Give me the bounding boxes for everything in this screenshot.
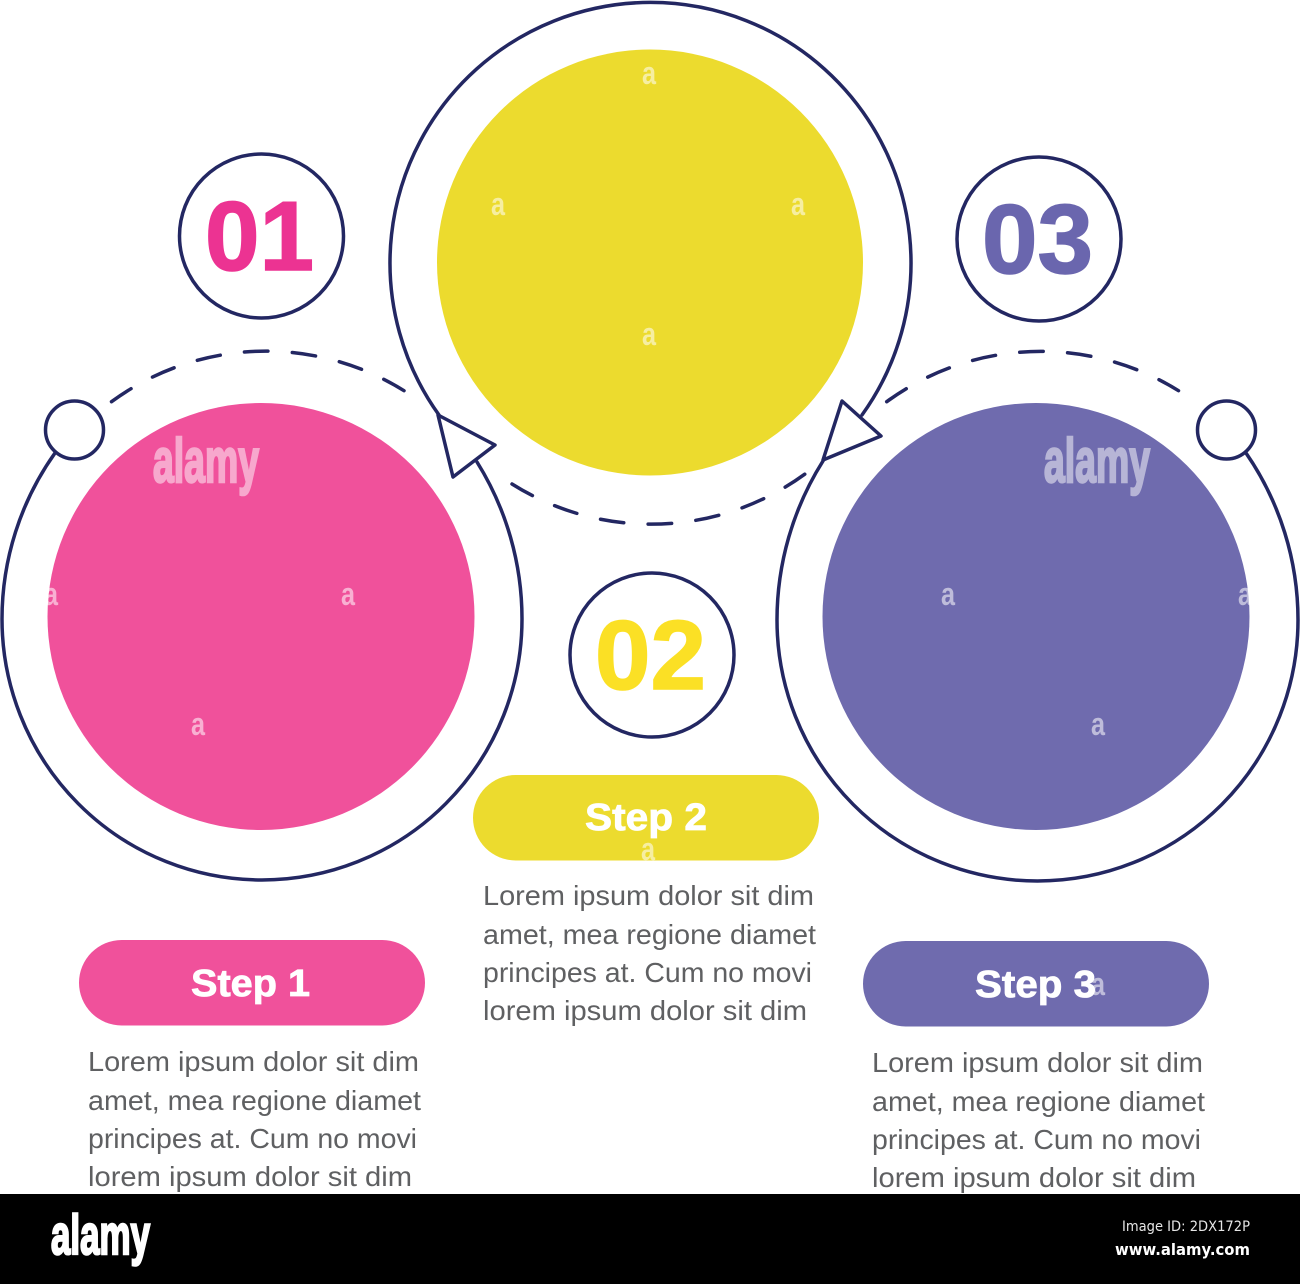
text block: step 3: principes at. Cum no movi xyxy=(872,1124,1201,1155)
text block: step 1: principes at. Cum no movi xyxy=(88,1123,417,1154)
text block: step 2: principes at. Cum no movi xyxy=(483,957,812,988)
text block: step 3: lorem ipsum dolor sit dim xyxy=(872,1162,1196,1193)
small watermark marks: a xyxy=(791,186,805,222)
pill: step 1 xyxy=(79,940,425,1026)
small watermark marks: a xyxy=(941,576,955,612)
node circle: right xyxy=(1198,401,1256,459)
outer ring: step 1 xyxy=(2,453,522,880)
text block: step 3: Lorem ipsum dolor sit dim xyxy=(872,1047,1203,1078)
dashed arc: step 3 onward xyxy=(887,351,1178,402)
arrowhead: right xyxy=(823,401,881,460)
text block: step 3 xyxy=(872,1047,1205,1193)
small watermark marks xyxy=(44,55,1252,1002)
text block: step 3: amet, mea regione diamet xyxy=(872,1086,1205,1117)
small watermark marks: a xyxy=(44,576,58,612)
number badge 01 xyxy=(180,154,344,318)
small watermark marks: a xyxy=(642,316,656,352)
footer logo: alamy xyxy=(51,1203,150,1266)
small watermark marks: a xyxy=(191,706,205,742)
pill: step 1: Step 1 xyxy=(191,963,310,1005)
filled disc: step 3 xyxy=(822,403,1250,830)
small watermark marks: a xyxy=(641,831,655,867)
pill: step 2 xyxy=(473,775,819,860)
text block: step 1: amet, mea regione diamet xyxy=(88,1085,421,1116)
text block: step 1: Lorem ipsum dolor sit dim xyxy=(88,1046,419,1077)
pill: step 3 xyxy=(863,941,1209,1026)
panel: step 2 circle xyxy=(390,2,911,476)
text block: step 2: lorem ipsum dolor sit dim xyxy=(483,995,807,1026)
image id: Image ID: 2DX172P xyxy=(1122,1219,1250,1235)
number badge 03 xyxy=(957,157,1121,321)
outer ring: step 2 xyxy=(390,2,911,415)
small watermark marks: a xyxy=(1238,576,1252,612)
small watermark marks: a xyxy=(1091,706,1105,742)
small watermark marks: a xyxy=(341,576,355,612)
text block: step 2: amet, mea regione diamet xyxy=(483,919,816,950)
text block: step 1: lorem ipsum dolor sit dim xyxy=(88,1161,412,1192)
panel: step 3 circle xyxy=(777,403,1298,881)
pill: step 2: Step 2 xyxy=(585,797,707,839)
number badge 01: 01 xyxy=(205,181,314,291)
footer bar xyxy=(0,1194,1300,1284)
filled disc: step 2 xyxy=(437,50,863,476)
watermark on disc 1: alamy xyxy=(153,427,259,496)
watermark on disc 3: alamy xyxy=(1044,427,1150,496)
dashed arc: step 1 to 2 xyxy=(112,351,404,402)
number badge 02 xyxy=(570,573,734,737)
number badge 03: 03 xyxy=(982,184,1093,294)
small watermark marks: a xyxy=(642,55,656,91)
arrowhead: left xyxy=(438,415,495,477)
pill: step 3: Step 3 xyxy=(975,964,1096,1006)
node circle: left xyxy=(46,401,104,459)
small watermark marks: a xyxy=(1091,966,1105,1002)
number badge 02: 02 xyxy=(595,600,706,710)
text block: step 2 xyxy=(483,880,816,1026)
website: www.alamy.com xyxy=(1115,1240,1250,1259)
small watermark marks: a xyxy=(491,186,505,222)
dashed arc: step 2 to 3 xyxy=(512,474,805,524)
filled disc: step 1 xyxy=(48,403,474,830)
text block: step 2: Lorem ipsum dolor sit dim xyxy=(483,880,814,911)
outer ring: step 3 xyxy=(777,453,1298,881)
text block: step 1 xyxy=(88,1046,421,1192)
panel: step 1 circle xyxy=(2,403,522,880)
